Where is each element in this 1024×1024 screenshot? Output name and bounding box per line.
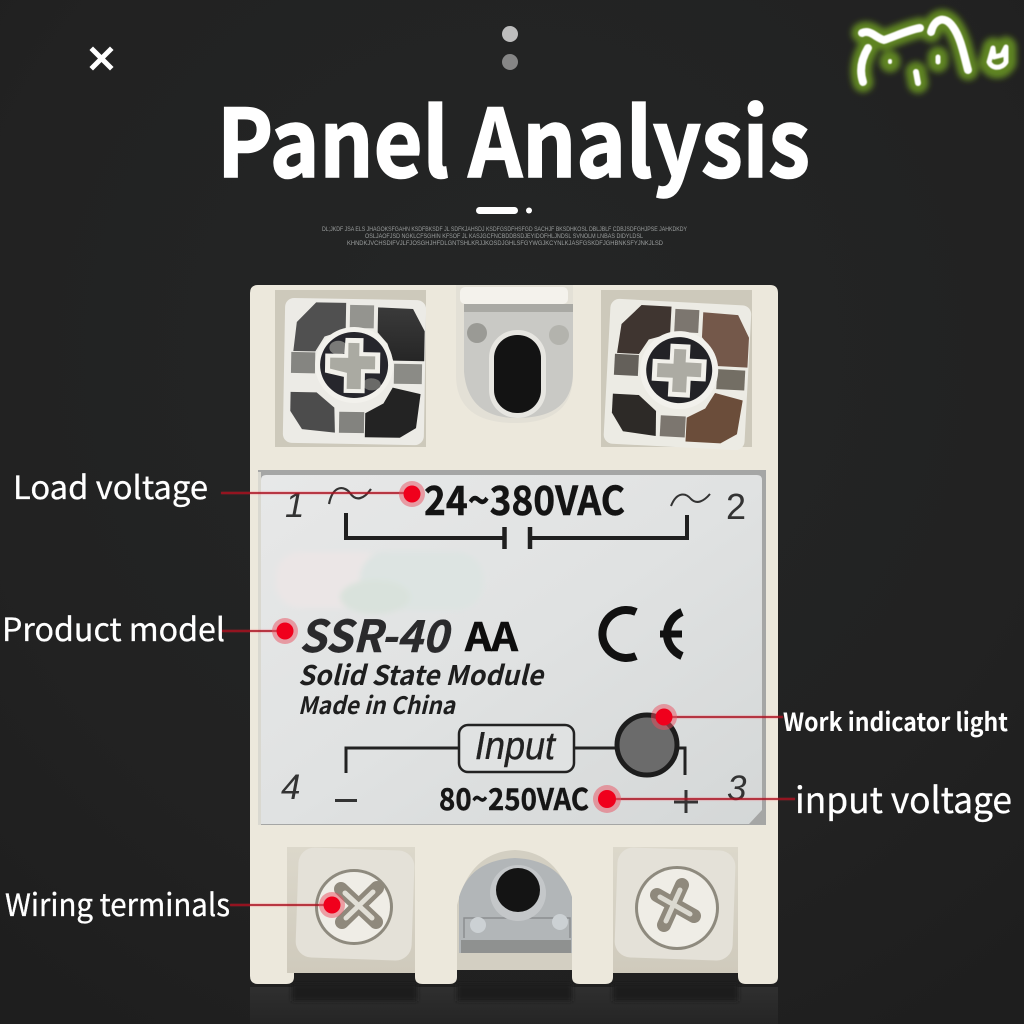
terminal number 3: 3	[727, 769, 747, 808]
callout marker: input voltage	[593, 785, 621, 813]
callout marker: load voltage	[399, 481, 425, 507]
leader lines	[221, 493, 795, 905]
bottom mounting bracket	[457, 850, 572, 970]
model suffix: AA	[464, 607, 519, 663]
label: work indicator light: Work indicator light	[783, 703, 1008, 739]
model name: SSR-40	[299, 601, 453, 665]
close icon	[93, 50, 110, 67]
fine print subtitle: OSLJAOFJSD NGKLCFSGHIN KFSOF JL KASJGCFNCBDDBSDJEYIDOFHLJNDSL SVNOLM LNBAS DIDYLDSL	[365, 234, 644, 240]
top mounting bracket	[456, 285, 573, 423]
work indicator LED	[617, 715, 677, 775]
fine print subtitle	[322, 227, 687, 247]
terminal number 2: 2	[726, 486, 746, 527]
label: wiring terminals: Wiring terminals	[5, 880, 230, 925]
load circuit bracket	[346, 513, 687, 549]
callout marker: wiring terminals	[319, 892, 345, 918]
label: input voltage: input voltage	[795, 772, 1012, 824]
label: product model: Product model	[2, 605, 225, 651]
input label: Input	[475, 725, 557, 768]
fine print subtitle: DL;JKDF JSA ELS JHAGOKSFGAHN KSDFBKSDF JL SDFKJAHSDJ KSDFGSDFHSFGD SACHJF BKSDHKOSL DBLJBLF CDBJSDFGHJPSE JAHKDKDY	[322, 227, 687, 233]
redacted smudge	[276, 552, 483, 614]
bottom right terminal	[613, 847, 738, 973]
pagination dots	[502, 26, 518, 70]
tilde right	[671, 494, 710, 506]
title underline accent	[476, 207, 532, 214]
minus sign	[335, 799, 357, 802]
fine print subtitle: KHNDKJVCHSDIFVJLFJOSGHJHFDLGNTSHLKRJJKOSDJGHLSFGYWGJKCYNLKJASFGSKDFJGHBNKSFYJNKJLSD	[347, 241, 664, 247]
product description: Solid State Module	[298, 654, 545, 693]
input box	[459, 725, 574, 772]
top left terminal	[275, 290, 426, 447]
origin text: Made in China	[298, 686, 457, 721]
callout marker: work indicator	[651, 704, 677, 730]
top right terminal	[601, 290, 752, 451]
bottom left terminal	[287, 847, 415, 973]
label plate	[258, 469, 766, 825]
terminal number 1: 1	[285, 486, 304, 525]
input circuit line	[346, 748, 685, 775]
reflection under relay	[250, 984, 778, 1024]
tilde left	[329, 488, 371, 504]
label: load voltage: Load voltage	[13, 463, 208, 509]
logo: glowing cat doodle	[861, 20, 1006, 83]
terminal number 4: 4	[281, 768, 300, 807]
voltage rating: 24~380VAC	[424, 469, 625, 527]
plus sign	[674, 790, 698, 813]
title: Panel Analysis	[217, 69, 810, 205]
input voltage rating: 80~250VAC	[439, 775, 589, 819]
callout marker: product model	[272, 618, 298, 644]
relay body	[250, 285, 778, 984]
CE mark	[602, 610, 682, 658]
